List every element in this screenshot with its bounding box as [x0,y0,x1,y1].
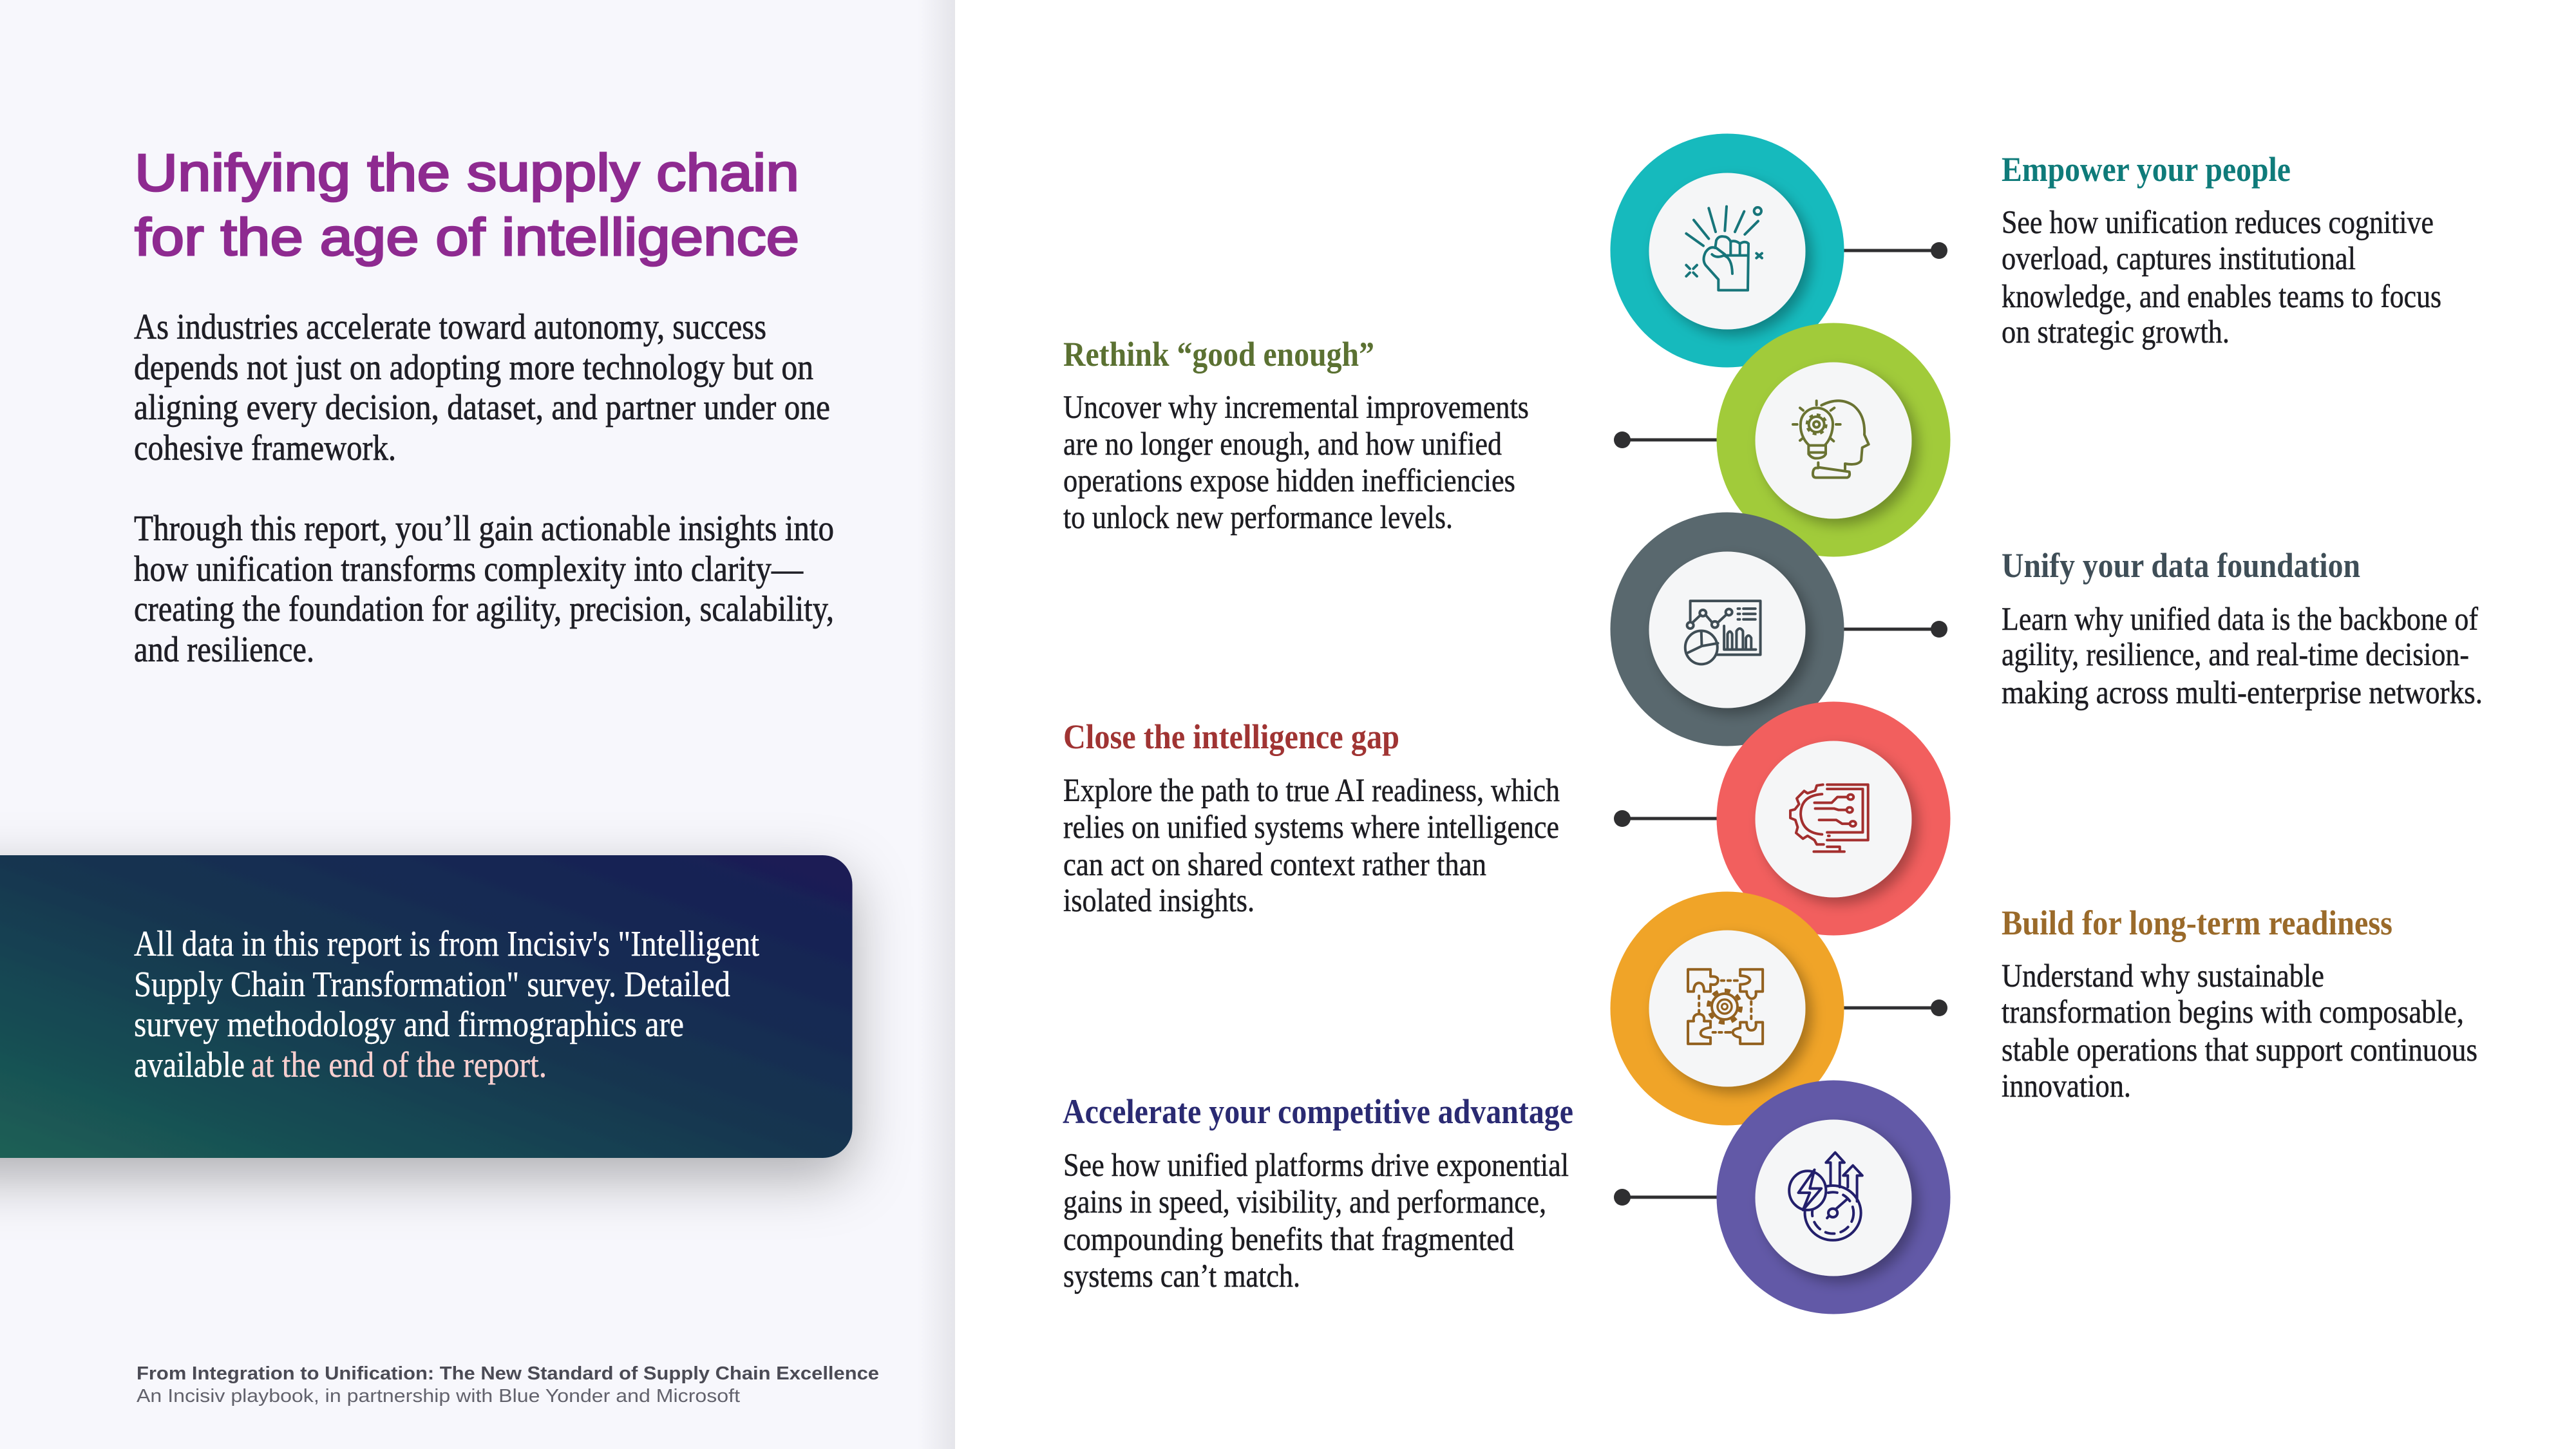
circle: teal empower [1610,134,1844,367]
text block: build for long-term readiness: stable operations that support continuous [2002,1032,2477,1068]
text block: close the intelligence gap: can act on shared context rather than [1063,847,1486,883]
panel: left intro background [0,0,955,1449]
circle: coral close the gap [1717,702,1950,935]
icon: raised fist [1686,207,1762,290]
text block: unify your data foundation: Unify your data foundation [2002,546,2360,585]
circle: orange build [1610,891,1844,1126]
text block: intro paragraph two: Through this report, you’ll gain actionable insights into [134,509,834,549]
circle: slate unify [1610,513,1844,746]
text block: accelerate your competitive advantage: See how unified platforms drive exponential [1063,1148,1569,1184]
icon: analytics dashboard [1685,601,1761,664]
text block: build for long-term readiness: transformation begins with composable, [2002,994,2464,1030]
text block: rethink good enough: Rethink “good enough” [1063,335,1374,374]
text block: intro paragraph two: creating the foundation for agility, precision, scalability, [134,589,834,629]
text block: close the intelligence gap: Explore the path to true AI readiness, which [1063,773,1560,809]
text block: rethink good enough: to unlock new performance levels. [1063,500,1453,536]
icon: gear and circuit monitor [1790,784,1868,851]
icon: puzzle gear [1709,990,1741,1023]
text block: close the intelligence gap: isolated insights. [1063,883,1255,919]
title [135,144,799,267]
text block: intro paragraph one: aligning every decision, dataset, and partner under one [134,388,830,428]
text block: build for long-term readiness: Understand why sustainable [2002,958,2324,994]
callout: survey data source: available [134,1045,245,1085]
text block: unify your data foundation: making across multi-enterprise networks. [2002,675,2483,711]
title: for the age of intelligence [135,208,799,267]
text block: accelerate your competitive advantage: compounding benefits that fragmented [1063,1222,1514,1258]
connector: close the intelligence gap [1614,810,1719,827]
text block: intro paragraph one: depends not just on adopting more technology but on [134,348,813,388]
icon: puzzle pieces and gear [1688,969,1763,1044]
text block: empower your people: Empower your people [2002,150,2291,189]
text block: intro paragraph two [134,509,834,670]
text block: unify your data foundation: agility, resilience, and real-time decision- [2002,637,2469,673]
footer: report credit: From Integration to Unification: The New Standard of Supply Chain Excellence [137,1363,879,1384]
icon: bulb gear teeth [1807,415,1826,434]
callout: survey data source: at the end of the report. [251,1045,547,1085]
text block: close the intelligence gap: relies on unified systems where intelligence [1063,810,1559,846]
text block: empower your people: knowledge, and enables teams to focus [2002,279,2441,315]
text block: rethink good enough [1063,335,1529,536]
circle: purple accelerate [1717,1081,1950,1314]
connector: rethink good enough [1614,431,1719,448]
text block: close the intelligence gap [1063,717,1560,919]
text block: accelerate your competitive advantage: Accelerate your competitive advantage [1063,1092,1573,1131]
text block: empower your people: on strategic growth. [2002,314,2230,350]
text block: close the intelligence gap: Close the intelligence gap [1063,717,1399,756]
footer: report credit [137,1363,879,1406]
text block: empower your people: overload, captures institutional [2002,241,2356,277]
text block: accelerate your competitive advantage: gains in speed, visibility, and performance, [1063,1184,1546,1220]
text block: rethink good enough: operations expose hidden inefficiencies [1063,463,1515,499]
text block: unify your data foundation [2002,546,2483,711]
text block: intro paragraph one: As industries accelerate toward autonomy, success [134,307,766,347]
text block: intro paragraph one: cohesive framework. [134,428,396,468]
circle: green rethink [1717,323,1950,556]
callout: survey data source: All data in this report is from Incisiv's "Intelligent [134,924,759,964]
text block: rethink good enough: are no longer enough, and how unified [1063,426,1502,462]
text block: intro paragraph two: and resilience. [134,630,314,670]
text block: build for long-term readiness [2002,904,2477,1104]
text block: unify your data foundation: Learn why unified data is the backbone of [2002,601,2478,638]
icon: head with light bulb [1793,401,1869,478]
text block: build for long-term readiness: innovation. [2002,1068,2131,1104]
text block: accelerate your competitive advantage [1063,1092,1573,1294]
footer: report credit: An Incisiv playbook, in partnership with Blue Yonder and Microsoft [137,1386,740,1406]
connector: unify your data foundation [1842,621,1947,638]
text block: empower your people: See how unification reduces cognitive [2002,205,2434,241]
text block: build for long-term readiness: Build for long-term readiness [2002,904,2392,942]
connector: build for long-term readiness [1842,999,1947,1016]
connector: accelerate your competitive advantage [1614,1189,1719,1206]
callout: survey data source: Supply Chain Transformation" survey. Detailed [134,965,730,1005]
callout: survey data source: survey methodology and firmographics are [134,1005,684,1045]
text block: rethink good enough: Uncover why incremental improvements [1063,390,1529,426]
text block: empower your people [2002,150,2441,350]
text block: accelerate your competitive advantage: systems can’t match. [1063,1258,1300,1294]
text block: intro paragraph two: how unification transforms complexity into clarity— [134,549,804,589]
callout: survey data source [0,855,853,1158]
title: Unifying the supply chain [135,144,799,202]
text block: intro paragraph one [134,307,830,468]
icon: speedometer with bolt and arrows [1789,1153,1862,1240]
connector: empower your people [1842,242,1947,259]
